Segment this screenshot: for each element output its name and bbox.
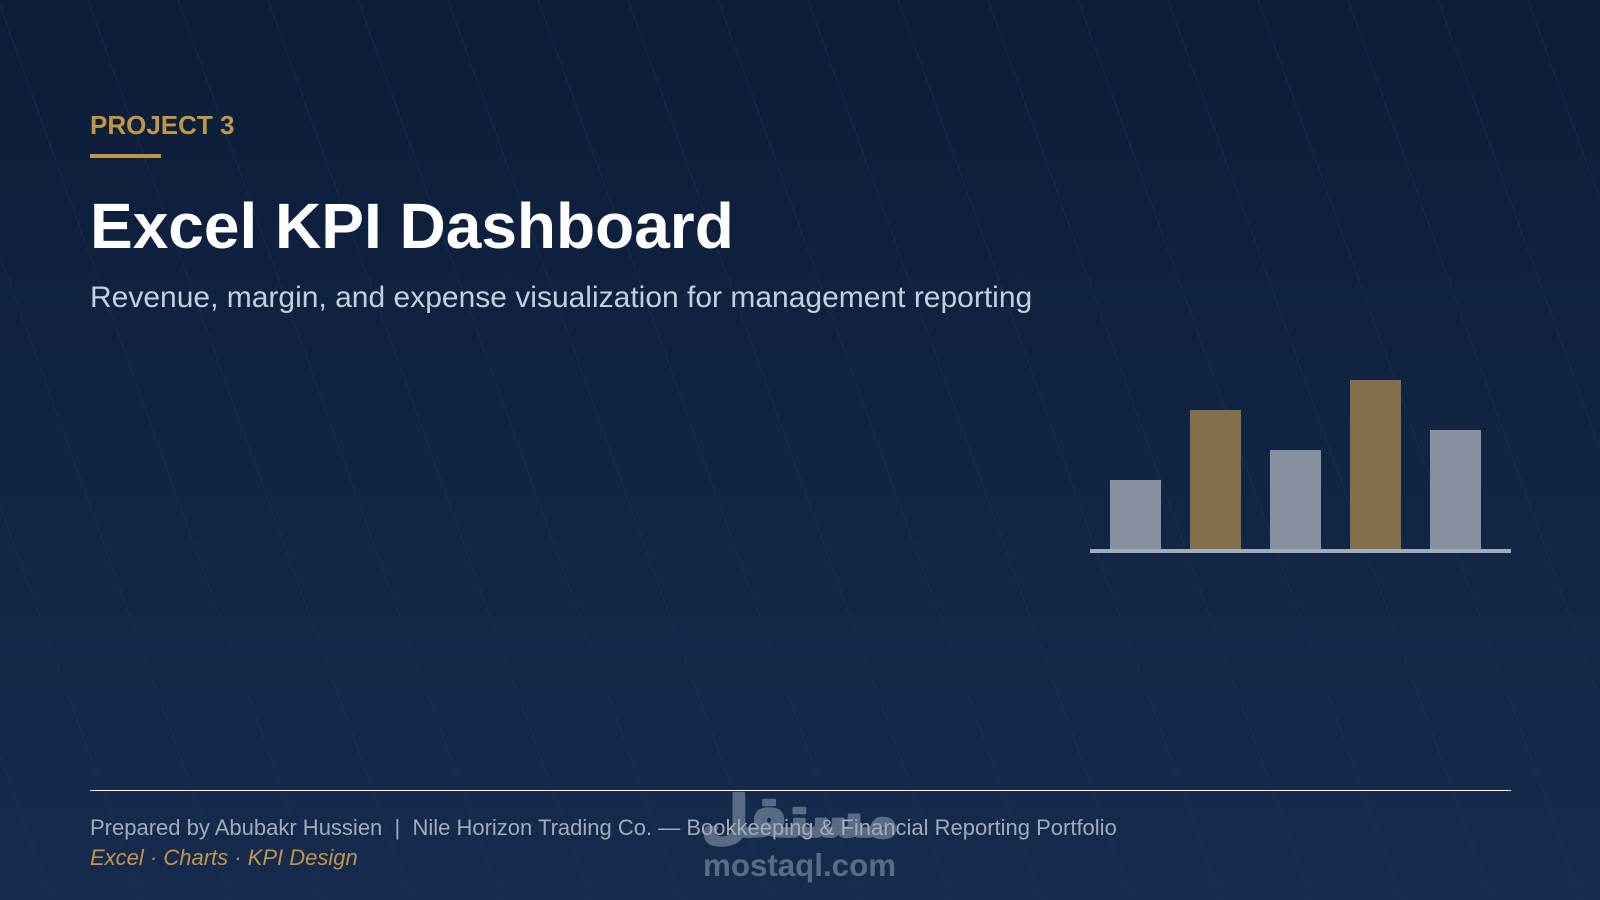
bar 3 — [1270, 450, 1321, 550]
watermark domain: mostaql.com — [703, 848, 896, 883]
footer skills line: Excel · Charts · KPI Design — [90, 845, 358, 870]
subtitle: Revenue, margin, and expense visualization for management reporting — [90, 281, 1032, 314]
footer credit line: Prepared by Abubakr Hussien | Nile Horizon Trading Co. — Bookkeeping & Financial Reporting Portfolio — [90, 815, 1117, 840]
eyebrow: project number: PROJECT 3 — [90, 110, 234, 140]
bar 5 — [1430, 430, 1481, 550]
bar 4 — [1350, 380, 1401, 550]
chart baseline — [1090, 549, 1511, 553]
footer divider — [90, 790, 1511, 791]
bar 2 — [1190, 410, 1241, 550]
bar 1 — [1110, 480, 1161, 550]
watermark arabic wordmark: مستقل — [702, 784, 898, 849]
title: Excel KPI Dashboard — [90, 190, 734, 262]
watermark: mostaql logo — [702, 784, 898, 883]
gold accent rule — [90, 154, 161, 158]
bar chart — [1090, 380, 1511, 553]
